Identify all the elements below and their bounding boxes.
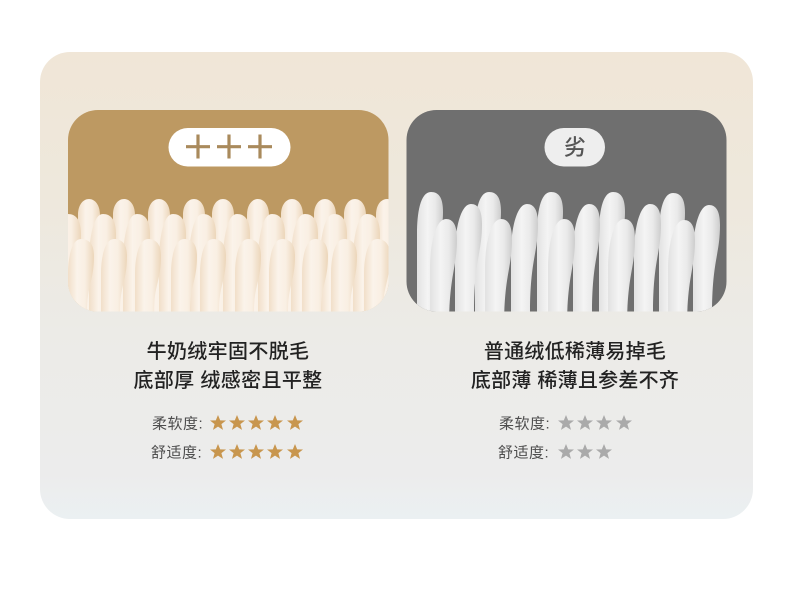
rating: regular velvet softness (499, 415, 632, 432)
heading: milk velvet description: 底部厚 绒感密且平整 (133, 369, 323, 392)
illustration: dense cream fibers (68, 199, 388, 312)
rating: regular velvet comfort (498, 444, 612, 462)
badge: inferior (544, 128, 605, 166)
rating: regular velvet comfort: 舒适度: (498, 444, 549, 462)
background card (40, 52, 753, 519)
rating: regular velvet softness: 柔软度: (499, 416, 550, 432)
rating: milk velvet softness (152, 415, 303, 432)
stars: three grey (558, 444, 612, 459)
heading: regular velvet description (471, 340, 679, 392)
badge: plus signs (168, 128, 290, 166)
rating: milk velvet softness: 柔软度: (152, 416, 203, 432)
stars: five gold (210, 415, 303, 430)
stars: four grey (558, 415, 632, 430)
stars: five gold comfort (210, 444, 303, 459)
heading: regular velvet description: 普通绒低稀薄易掉毛 (484, 340, 666, 363)
rating: milk velvet comfort (151, 444, 303, 462)
panel: regular velvet (406, 110, 726, 330)
rating: milk velvet comfort: 舒适度: (151, 444, 202, 462)
heading: milk velvet description (133, 340, 323, 392)
illustration: sparse white fibers (417, 192, 720, 312)
heading: milk velvet description: 牛奶绒牢固不脱毛 (147, 340, 309, 363)
heading: regular velvet description: 底部薄 稀薄且参差不齐 (471, 369, 679, 392)
badge: inferior: 劣 (564, 135, 586, 160)
panel: milk velvet (68, 110, 388, 312)
